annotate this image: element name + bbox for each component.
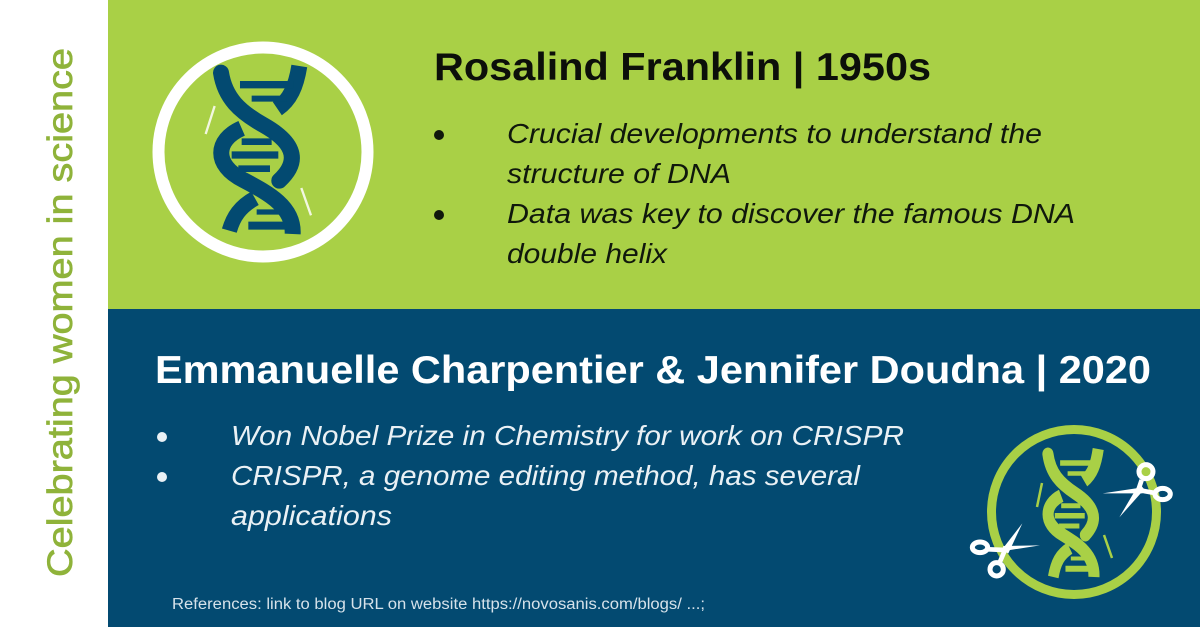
heading: Franklin: Rosalind Franklin | 1950s xyxy=(434,46,931,89)
references: References: link to blog URL on website https://novosanis.com/blogs/ ...; xyxy=(172,596,705,613)
bullet list: Franklin: structure of DNA xyxy=(507,158,731,189)
icon: DNA in white ring xyxy=(158,48,368,256)
bullet list: CRISPR xyxy=(157,420,904,531)
bullet list: CRISPR: CRISPR, a genome editing method, has several xyxy=(231,460,861,491)
bullet list: Franklin xyxy=(434,118,1075,269)
bullet list: CRISPR: Won Nobel Prize in Chemistry for work on CRISPR xyxy=(231,420,904,451)
icon: scissors left xyxy=(972,523,1040,576)
icon: DNA with scissors xyxy=(972,430,1170,594)
bullet list: CRISPR: applications xyxy=(231,500,392,531)
panel: Rosalind Franklin xyxy=(108,0,1200,309)
sidebar title: Celebrating women in science xyxy=(41,48,80,577)
bullet list: Franklin: Crucial developments to understand the xyxy=(507,118,1042,149)
bullet list: Franklin: Data was key to discover the famous DNA xyxy=(507,198,1075,229)
icon: scissors right xyxy=(1103,465,1170,517)
panel: Charpentier and Doudna xyxy=(108,309,1200,627)
bullet list: Franklin: double helix xyxy=(507,238,668,269)
heading: Charpentier and Doudna: Emmanuelle Charpentier & Jennifer Doudna | 2020 xyxy=(155,349,1151,392)
